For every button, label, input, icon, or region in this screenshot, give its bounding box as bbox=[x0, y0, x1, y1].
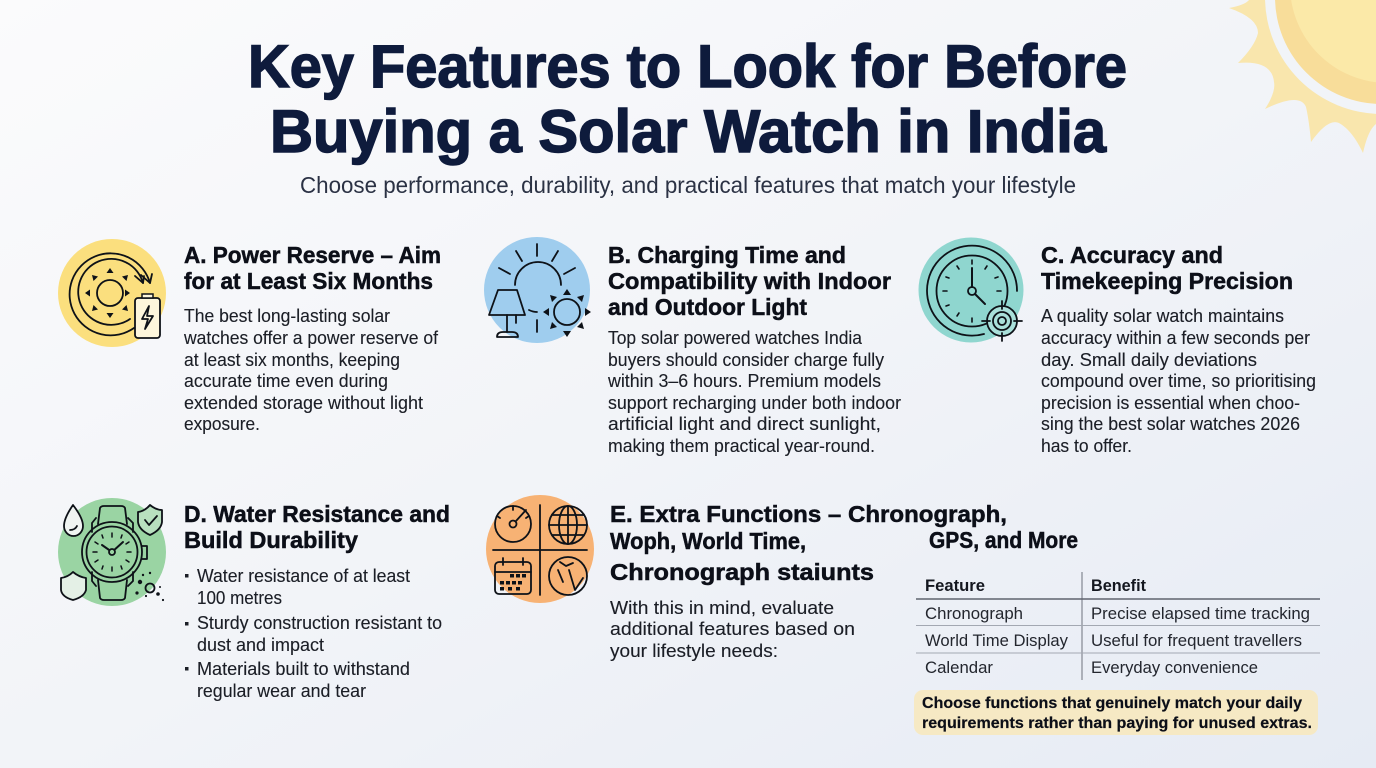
icon: sun and lamp bbox=[484, 237, 591, 343]
text E: your lifestyle needs: bbox=[610, 641, 778, 661]
table: features and benefits: World Time Display bbox=[925, 631, 1068, 650]
heading A bbox=[184, 242, 441, 294]
bullet list D: regular wear and tear bbox=[197, 681, 366, 701]
bullet list D bbox=[185, 566, 442, 701]
text C: A quality solar watch maintains bbox=[1041, 306, 1284, 326]
text E: additional features based on bbox=[610, 619, 855, 639]
panel: D water resistance bbox=[58, 498, 450, 701]
table: features and benefits: Precise elapsed time tracking bbox=[1091, 604, 1310, 623]
text E bbox=[610, 598, 855, 661]
heading C: C. Accuracy and bbox=[1041, 242, 1223, 268]
heading A: for at Least Six Months bbox=[184, 268, 433, 294]
icon: sun and battery bbox=[58, 239, 166, 347]
text B: Top solar powered watches India bbox=[608, 328, 863, 348]
table: features and benefits: Everyday convenience bbox=[1091, 658, 1258, 677]
table: features and benefits: Feature bbox=[925, 577, 985, 595]
text B: support recharging under both indoor bbox=[608, 393, 901, 413]
text B: buyers should consider charge fully bbox=[608, 350, 884, 370]
text B: within 3–6 hours. Premium models bbox=[607, 371, 881, 391]
panel: B charging time bbox=[484, 237, 901, 456]
title: Key Features to Look for Before bbox=[248, 33, 1127, 100]
heading B: and Outdoor Light bbox=[608, 294, 807, 320]
heading B: Compatibility with Indoor bbox=[608, 268, 891, 294]
text A: at least six months, keeping bbox=[184, 350, 400, 370]
table: features and benefits: Calendar bbox=[925, 658, 993, 677]
bullet list D: dust and impact bbox=[197, 635, 324, 655]
text C: has to offer. bbox=[1041, 436, 1132, 456]
callout: advice note: requirements rather than paying for unused extras. bbox=[922, 715, 1312, 732]
text B: artificial light and direct sunlight, bbox=[608, 414, 881, 434]
table: features and benefits: Benefit bbox=[1091, 577, 1146, 595]
text E: With this in mind, evaluate bbox=[610, 598, 834, 618]
bullet list D: 100 metres bbox=[197, 588, 282, 608]
table: features and benefits: Chronograph bbox=[925, 604, 1023, 623]
heading E: Woph, World Time, bbox=[610, 528, 806, 554]
callout: advice note bbox=[914, 690, 1318, 735]
bullet list D: Water resistance of at least bbox=[197, 566, 410, 586]
icon: watch with shields bbox=[58, 498, 166, 606]
text A: exposure. bbox=[184, 414, 260, 434]
panel: C accuracy bbox=[918, 238, 1316, 456]
text A: accurate time even during bbox=[184, 371, 388, 391]
table: features and benefits bbox=[916, 572, 1320, 680]
heading E: E. Extra Functions – Chronograph, bbox=[610, 501, 1007, 527]
heading B bbox=[608, 242, 891, 320]
heading E: GPS, and More bbox=[929, 527, 1078, 553]
text A: The best long-lasting solar bbox=[184, 306, 390, 326]
title bbox=[248, 33, 1127, 165]
bullet list D: Materials built to withstand bbox=[197, 659, 410, 679]
panel: A power reserve bbox=[58, 239, 441, 434]
text C: precision is essential when choo- bbox=[1041, 393, 1300, 413]
text C: accuracy within a few seconds per bbox=[1041, 328, 1310, 348]
heading D bbox=[184, 501, 450, 553]
text B bbox=[607, 328, 901, 456]
heading E bbox=[610, 501, 1078, 585]
heading A: A. Power Reserve – Aim bbox=[184, 242, 441, 268]
panel: E extra functions bbox=[486, 495, 1320, 735]
heading D: Build Durability bbox=[184, 527, 358, 553]
text C: sing the best solar watches 2026 bbox=[1041, 414, 1300, 434]
text B: making them practical year-round. bbox=[608, 436, 875, 456]
heading E: Chronograph staiunts bbox=[610, 559, 874, 585]
text C bbox=[1041, 306, 1316, 456]
bullet list D: Sturdy construction resistant to bbox=[197, 613, 442, 633]
icon: four function grid bbox=[486, 495, 594, 603]
heading D: D. Water Resistance and bbox=[184, 501, 450, 527]
heading C: Timekeeping Precision bbox=[1041, 268, 1293, 294]
text C: day. Small daily deviations bbox=[1041, 350, 1257, 370]
icon: decorative sun bbox=[1229, 0, 1376, 153]
icon: clock and target bbox=[918, 238, 1024, 342]
text A bbox=[183, 306, 439, 434]
text C: compound over time, so prioritising bbox=[1041, 371, 1316, 391]
text A: watches offer a power reserve of bbox=[183, 328, 439, 348]
text A: extended storage without light bbox=[184, 393, 423, 413]
title: Buying a Solar Watch in India bbox=[270, 98, 1107, 165]
subtitle: Choose performance, durability, and practical features that match your lifestyle bbox=[300, 172, 1076, 198]
heading B: B. Charging Time and bbox=[608, 242, 846, 268]
callout: advice note: Choose functions that genuinely match your daily bbox=[922, 695, 1302, 712]
table: features and benefits: Useful for frequent travellers bbox=[1091, 631, 1302, 650]
heading C bbox=[1041, 242, 1293, 294]
